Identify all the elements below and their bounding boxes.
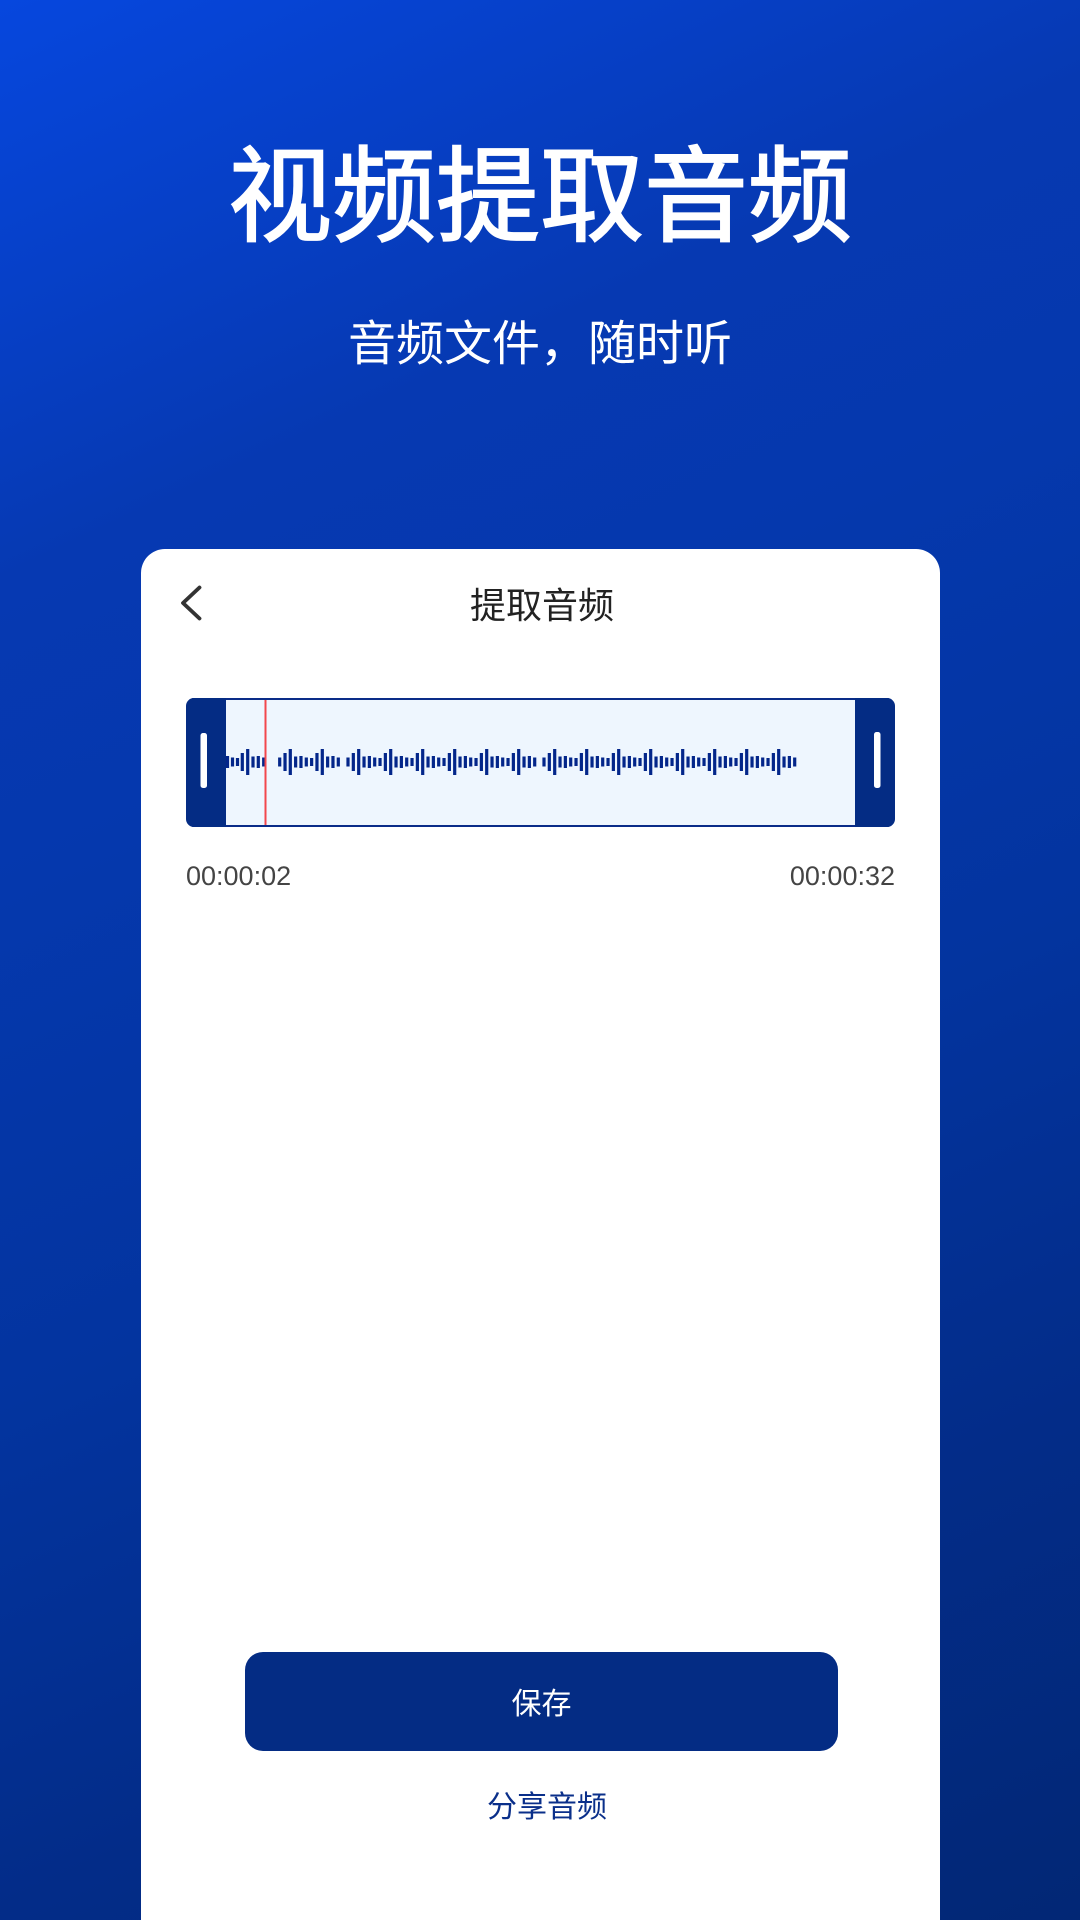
audio waveform trimmer xyxy=(186,698,895,827)
start time: 00:00:02 xyxy=(186,861,291,891)
title: 视频提取音频 xyxy=(228,140,852,256)
save button xyxy=(245,1652,838,1751)
icon: back arrow xyxy=(181,586,202,620)
end time: 00:00:32 xyxy=(790,861,895,891)
screen heading: 提取音频 xyxy=(470,585,614,626)
panel: phone screen xyxy=(141,549,940,1920)
share audio link: 分享音频 xyxy=(487,1791,607,1824)
subtitle: 音频文件，随时听 xyxy=(348,318,732,371)
save button: 保存 xyxy=(512,1688,572,1721)
